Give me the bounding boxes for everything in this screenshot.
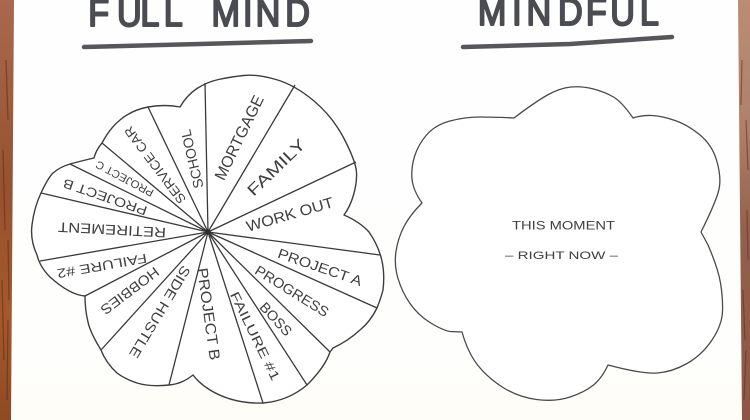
cloud outline	[395, 87, 723, 400]
cloud outline	[32, 75, 384, 403]
segment labels: RETIREMENT	[57, 219, 166, 241]
heading: mindful	[463, 0, 672, 47]
segment labels: FAILURE #1	[227, 289, 283, 383]
segment labels: WORK OUT	[244, 194, 336, 236]
segment labels: PROJECT A	[276, 245, 365, 289]
segment labels: SCHOOL	[177, 128, 207, 190]
segment labels: FAMILY	[244, 136, 310, 200]
segment labels: PROJECT B	[61, 176, 149, 218]
segment labels: PROJECT C	[94, 158, 156, 198]
segment labels: PROJECT B	[193, 267, 223, 361]
caption: this moment: THIS MOMENT	[512, 218, 616, 232]
caption: right now: – RIGHT NOW –	[505, 250, 619, 262]
panel: mindful	[395, 0, 723, 400]
segment labels: BOSS	[257, 299, 295, 339]
segment labels: PROGRESS	[252, 262, 332, 320]
segment labels: MORTGAGE	[212, 93, 268, 183]
spokes dividing the segments	[40, 83, 380, 403]
pie chart: crowded mind cloud	[32, 75, 384, 403]
segment labels: SERVICE CAR	[121, 123, 189, 207]
empty cloud with single thought	[395, 87, 723, 400]
segment labels: FAILURE #2	[56, 251, 148, 281]
segment labels: SIDE HUSTLE	[126, 263, 194, 361]
segment labels	[56, 93, 365, 383]
segment labels: HOBBIES	[98, 264, 162, 318]
hub where spokes converge	[205, 229, 211, 235]
panel: full mind	[32, 0, 384, 403]
